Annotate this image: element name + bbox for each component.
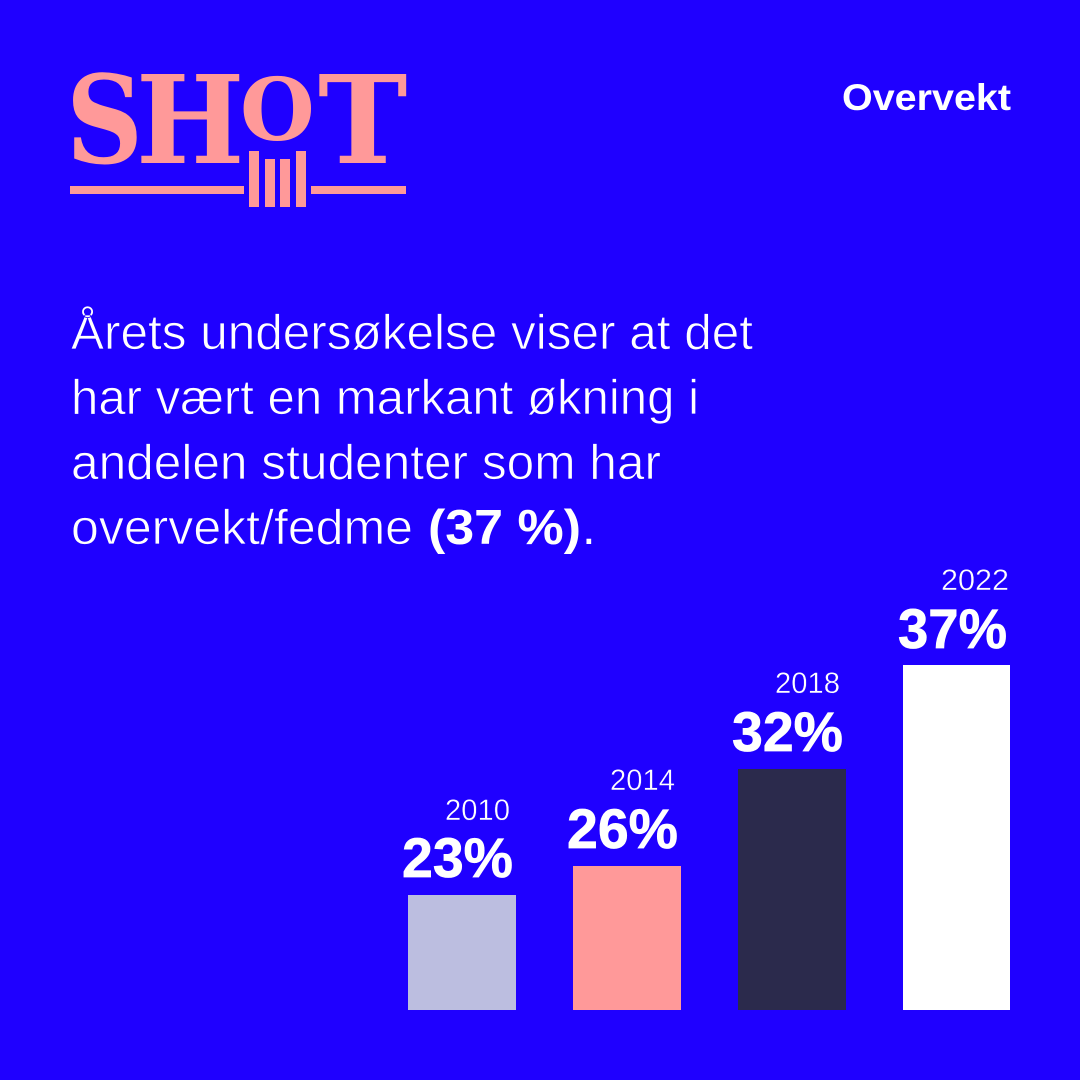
bar: 2014 (567, 764, 681, 1010)
logo: SHOT: S (66, 49, 143, 193)
bar: 2010: 2010 (445, 794, 510, 827)
logo: SHOT: O (240, 60, 315, 161)
bar: 2014: 2014 (610, 764, 675, 797)
text block: survey finding: (37 %) (428, 501, 581, 555)
bar: 2018 (732, 667, 846, 1010)
logo: SHOT (66, 48, 407, 207)
bar: 2022: 37% (898, 597, 1007, 660)
text block: survey finding: overvekt/fedme (71, 501, 413, 555)
bar: 2010 (402, 794, 516, 1010)
heading: Overvekt: Overvekt (842, 77, 1011, 118)
text block: survey finding: . (582, 501, 596, 555)
logo: SHOT: T (318, 48, 407, 192)
bar chart (402, 564, 1010, 1010)
text block: survey finding: andelen studenter som har (71, 436, 661, 490)
bar: 2010: 23% (402, 826, 513, 889)
bar: 2018: 2018 (775, 667, 840, 700)
text block: survey finding (71, 306, 753, 555)
bar: 2018: 32% (732, 700, 843, 763)
text block: survey finding: Årets undersøkelse viser at det (71, 306, 753, 360)
text block: survey finding: har vært en markant økning i (71, 371, 699, 425)
bar: 2014: 26% (567, 797, 678, 860)
logo: SHOT: H (136, 49, 244, 192)
bar: 2022: 2022 (941, 564, 1009, 597)
bar: 2022 (898, 564, 1010, 1010)
